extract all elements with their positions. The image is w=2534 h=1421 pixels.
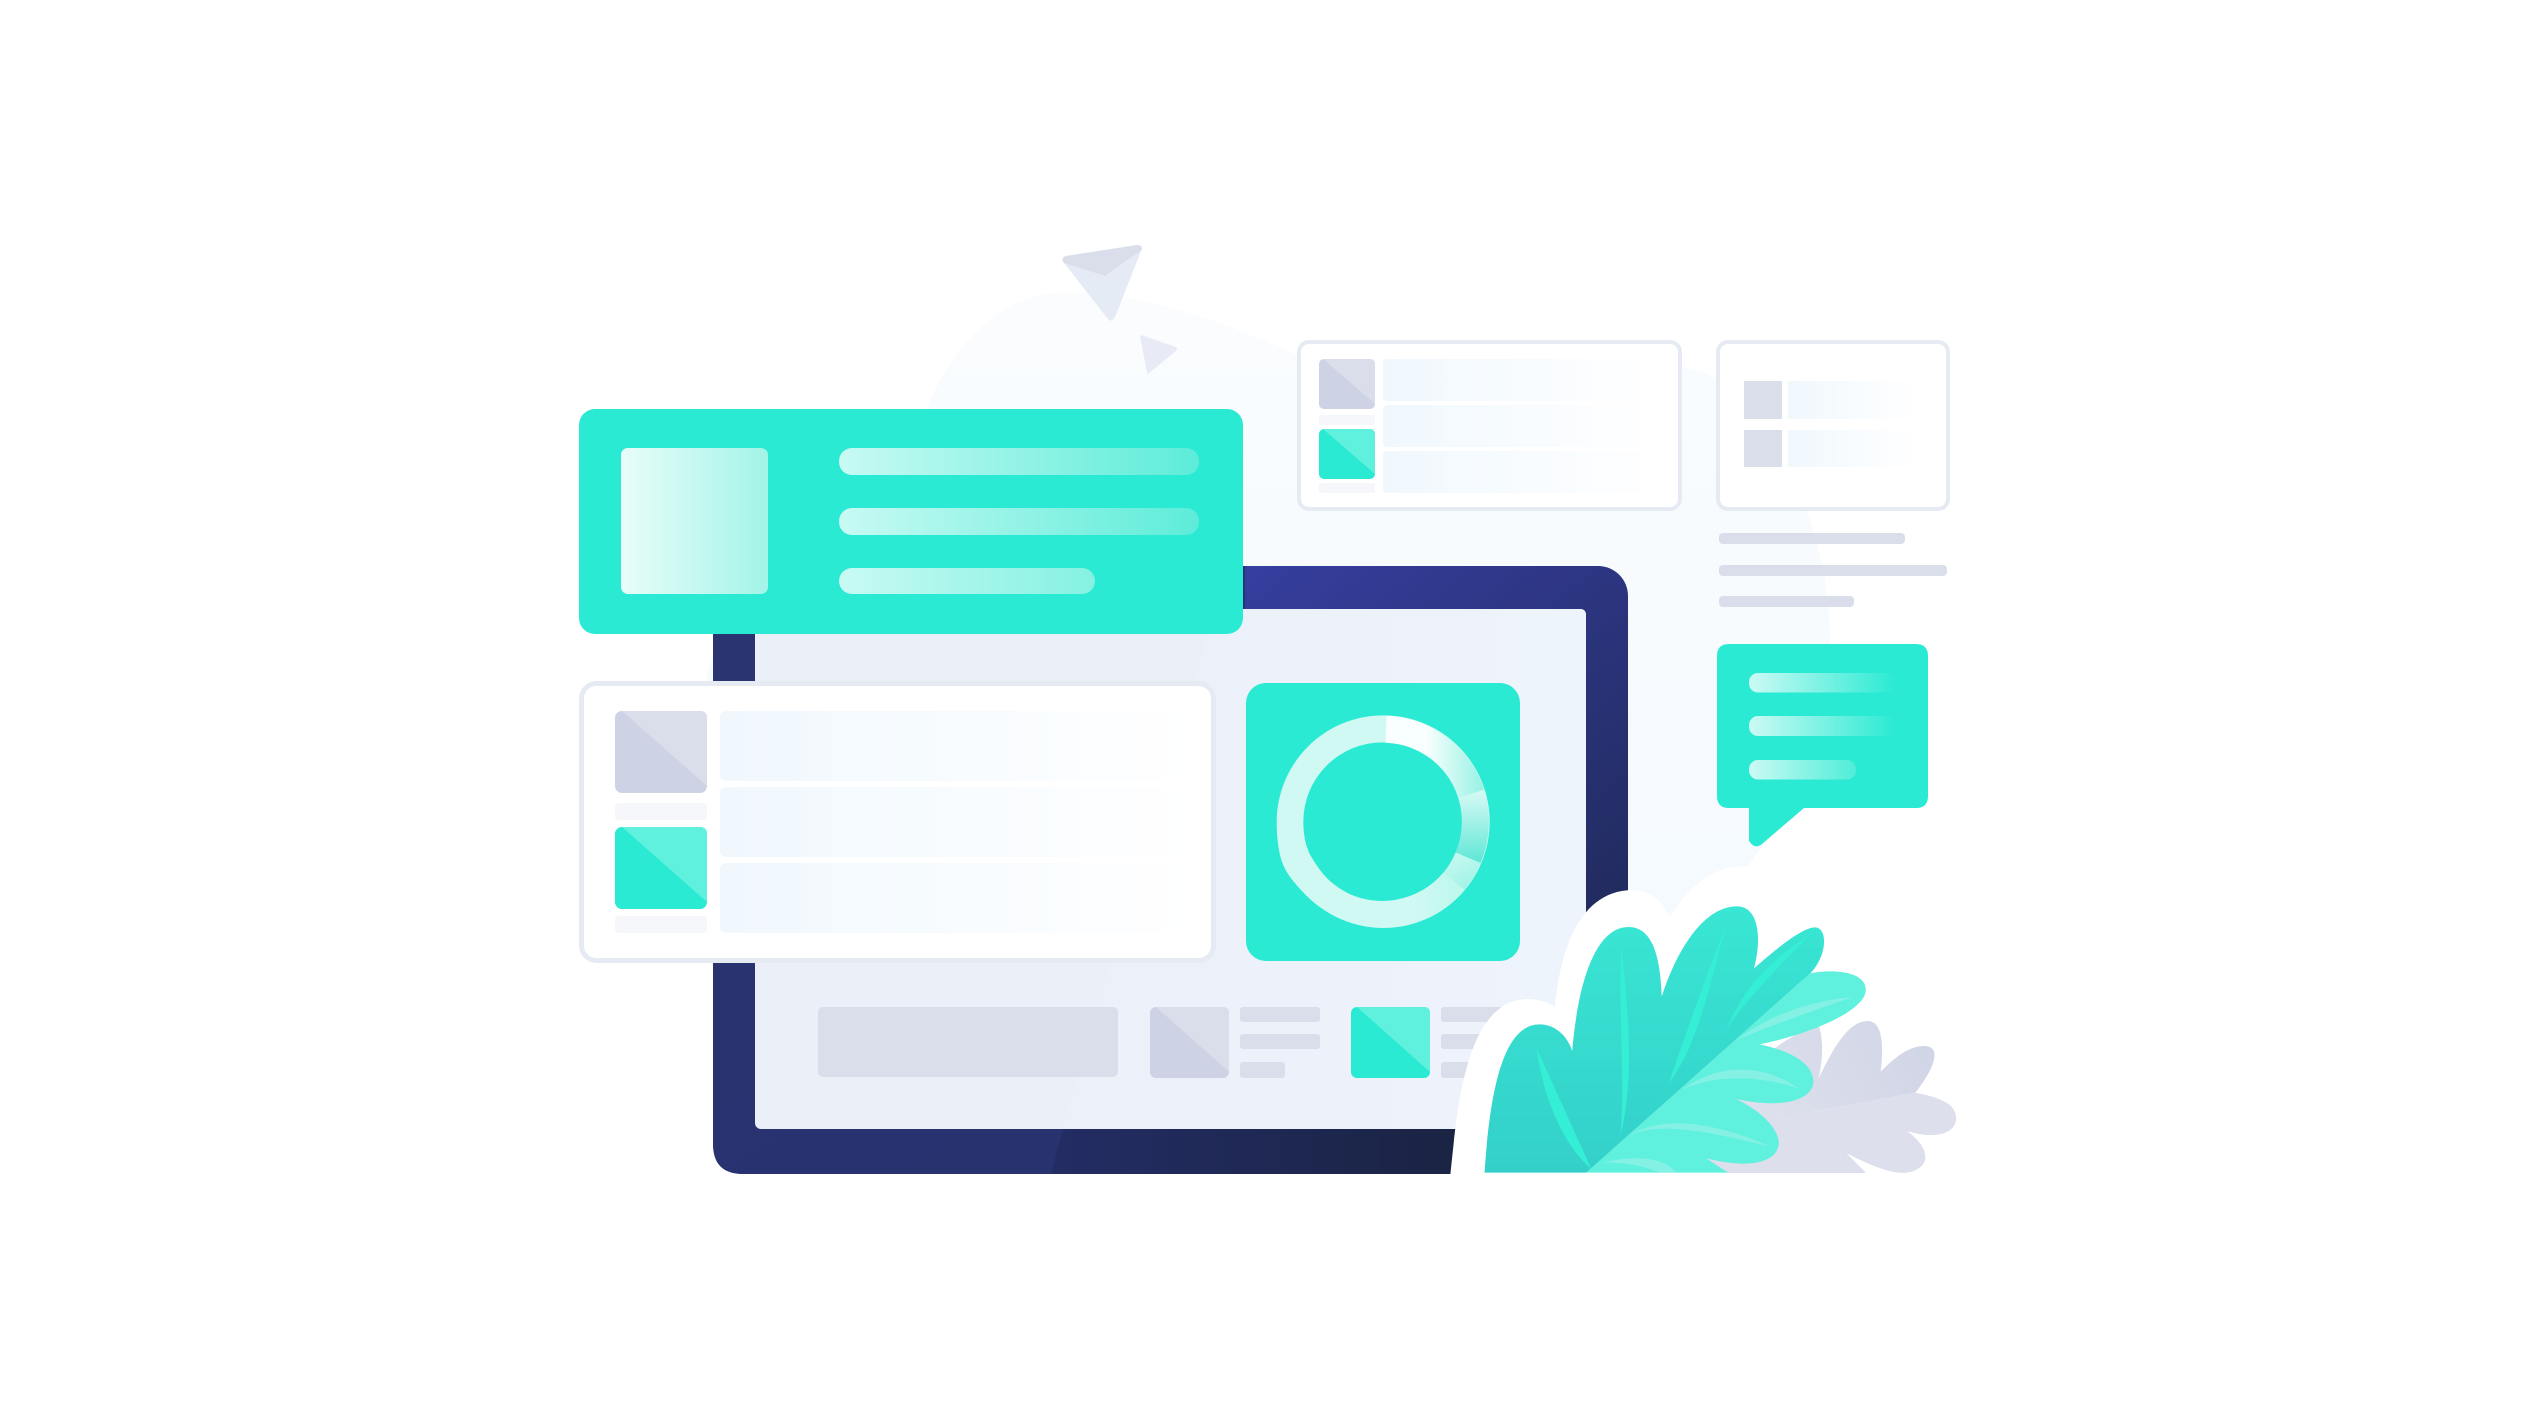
screen — [755, 609, 1586, 1129]
small triangle — [1140, 335, 1177, 374]
dark leaf veins — [1537, 924, 1810, 1169]
laptop frame — [713, 566, 1628, 1174]
bottom row: teal thumbnail — [1351, 1007, 1430, 1078]
top panel — [1299, 342, 1680, 509]
teal thumbnail — [1319, 429, 1375, 479]
light leaf veins — [1603, 997, 1852, 1173]
caption — [615, 803, 707, 820]
donut card — [1246, 683, 1520, 961]
gray text lines — [1719, 533, 1947, 607]
caption — [615, 916, 707, 933]
white halo — [1451, 867, 2012, 1178]
rows — [1383, 359, 1658, 493]
caption — [1319, 483, 1375, 493]
gray thumbnail — [1319, 359, 1375, 409]
bars — [1788, 381, 1918, 467]
text bars — [839, 448, 1199, 594]
teal leaves — [1485, 906, 1824, 1173]
gray thumbnail — [615, 711, 707, 793]
squares — [1744, 381, 1782, 467]
teal card — [579, 409, 1243, 634]
light teal leaves — [1586, 971, 1866, 1173]
paper plane — [1062, 245, 1142, 321]
bottom row: gray lines — [1240, 1007, 1320, 1078]
bottom row: gray block — [818, 1007, 1118, 1077]
gray leaves front — [1706, 1093, 1956, 1173]
donut chart — [1277, 715, 1490, 928]
bubble text bars — [1749, 673, 1896, 780]
speech bubble — [1717, 644, 1928, 846]
large white panel — [582, 684, 1214, 960]
rows — [720, 711, 1190, 933]
plant — [1451, 867, 2012, 1178]
image placeholder — [621, 448, 768, 594]
bottom row: gray thumbnail — [1150, 1007, 1229, 1078]
small panel — [1718, 342, 1948, 509]
caption — [1319, 415, 1375, 425]
background blob — [705, 292, 1830, 1100]
bottom row: right lines — [1441, 1007, 1521, 1078]
teal thumbnail — [615, 827, 707, 909]
gray leaves back — [1733, 1021, 1934, 1119]
